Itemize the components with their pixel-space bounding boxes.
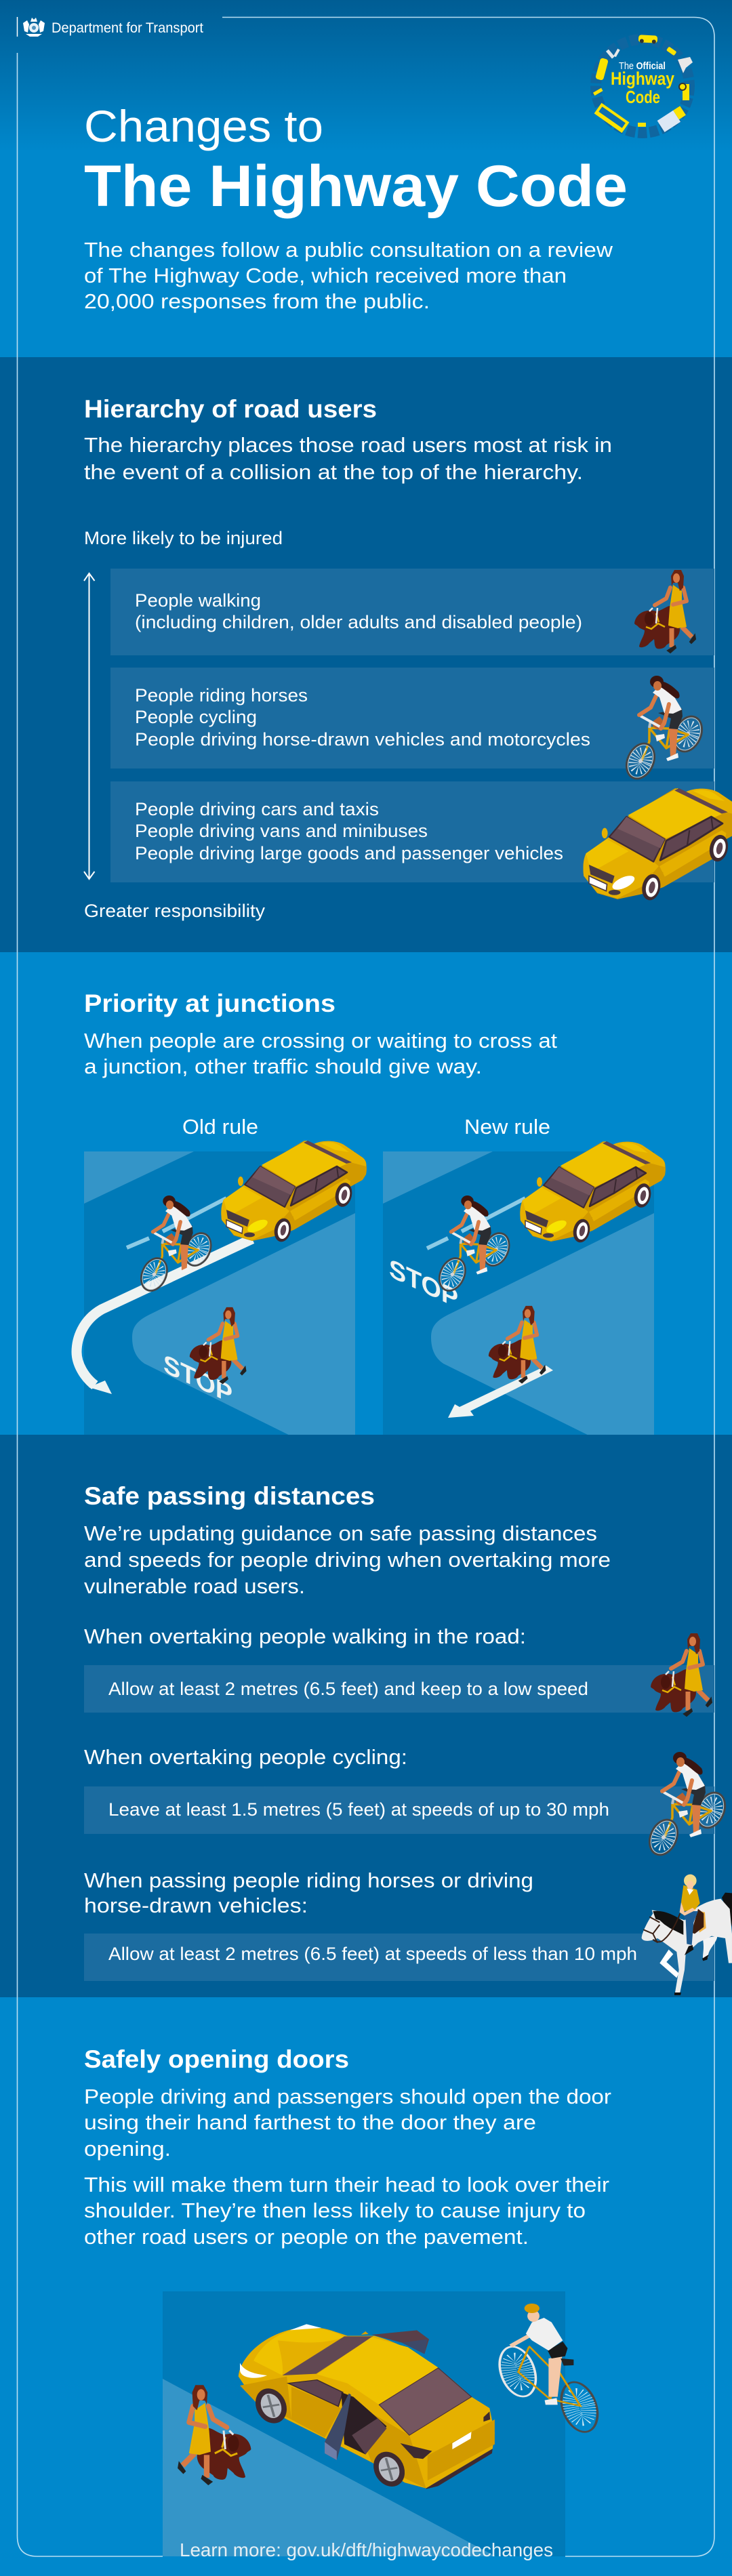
icon: yellow car [583,788,732,902]
row: people riding horses, cycling, horse-drawn vehicles and motorcycles: People riding horses [135,685,308,706]
heading: safe passing distances: Safe passing distances [84,1482,375,1510]
block: overtaking people walking [84,1624,714,1713]
block: passing people riding horses: horse-drawn vehicles: [84,1894,308,1917]
intro text: The changes follow a public consultation on a review [84,238,613,262]
label: greater responsibility: Greater responsibility [84,901,266,921]
intro text: of The Highway Code, which received more than [84,264,567,287]
logo: The Official Highway Code badge [593,35,693,133]
block: overtaking people cycling [84,1745,714,1834]
illustration: old rule [77,1115,367,1435]
text: turning head description: shoulder. They’re then less likely to cause injury to [84,2199,586,2222]
row: people riding horses, cycling, horse-drawn vehicles and motorcycles: People cycling [135,707,257,727]
text: safe passing description: vulnerable road users. [84,1574,305,1598]
logo: The Official Highway Code badge: Code [626,87,660,107]
text: hierarchy description [84,433,612,484]
text: opening doors description: People driving and passengers should open the door [84,2085,611,2108]
title: Changes to [84,101,323,151]
intro text [84,238,613,313]
text: hierarchy description: The hierarchy places those road users most at risk in [84,433,612,457]
illustration: new rule: STOP [389,1254,458,1314]
heading: safely opening doors: Safely opening doors [84,2045,349,2073]
title: The Highway Code [84,154,628,219]
panel: safe passing distances [84,1482,732,1995]
illustration: old rule: Old rule [182,1115,258,1139]
icon: car with open door [239,2324,495,2489]
row: people driving cars, vans and large vehicles: People driving large goods and passenger vehicles [135,843,563,863]
illustration: new rule [383,1115,666,1435]
block: overtaking people cycling: When overtaking people cycling: [84,1745,407,1769]
block: passing people riding horses: When passing people riding horses or driving [84,1868,533,1892]
block: overtaking people cycling: Leave at least 1.5 metres (5 feet) at speeds of up to 30 mph [108,1799,609,1820]
link: learn more: Learn more: gov.uk/dft/highwaycodechanges [180,2539,553,2560]
panel: hierarchy of road users [84,395,732,921]
illustration: opening car door [163,2291,603,2556]
block: passing people riding horses: Allow at least 2 metres (6.5 feet) at speeds of less than 10 mph [108,1944,637,1964]
text: safe passing description: and speeds for people driving when overtaking more [84,1548,611,1572]
text: safe passing description: We’re updating guidance on safe passing distances [84,1521,597,1545]
logo: Department for Transport: Department for Transport [52,20,203,36]
row: people walking: (including children, older adults and disabled people) [135,612,582,632]
text: turning head description: other road users or people on the pavement. [84,2225,529,2249]
row: people driving cars, vans and large vehicles [110,781,714,882]
row: people driving cars, vans and large vehicles: People driving vans and minibuses [135,821,428,841]
icon: person cycling with helmet [494,2304,603,2434]
text: safe passing description [84,1521,611,1598]
text: turning head description: This will make them turn their head to look over their [84,2173,609,2196]
icon: person walking with guide dog [634,570,695,653]
text: priority description: a junction, other traffic should give way. [84,1055,482,1078]
heading: priority at junctions: Priority at junctions [84,989,336,1017]
illustration: new rule: New rule [464,1115,550,1139]
panel: safely opening doors [84,2045,611,2560]
row: people walking [110,569,714,655]
logo: The Official Highway Code badge: Highway [611,68,674,89]
row: people walking: People walking [135,590,261,611]
title [84,101,628,219]
icon: person cycling [645,1752,730,1859]
block: passing people riding horses [84,1868,714,1981]
text: turning head description [84,2173,609,2249]
icon: person walking with guide dog [178,2385,251,2485]
text: priority description [84,1029,557,1078]
section: header background [0,0,732,357]
logo: Department for Transport [18,17,203,37]
panel: priority at junctions [77,989,666,1435]
text: opening doors description [84,2085,611,2161]
logo: The Official Highway Code badge: The Official [619,60,666,72]
icon: person walking with guide dog [651,1633,712,1716]
heading: hierarchy of road users: Hierarchy of road users [84,395,377,423]
label: more likely to be injured: More likely to be injured [84,528,283,548]
icon: person cycling [622,676,707,783]
icon: person riding horse [642,1875,732,1995]
text: priority description: When people are crossing or waiting to cross at [84,1029,557,1052]
row: people riding horses, cycling, horse-drawn vehicles and motorcycles [110,668,714,769]
row: people riding horses, cycling, horse-drawn vehicles and motorcycles: People driving horse-drawn vehicles and motorcycles [135,729,590,750]
text: hierarchy description: the event of a collision at the top of the hierarchy. [84,460,583,484]
text: opening doors description: using their hand farthest to the door they are [84,2110,536,2134]
block: overtaking people walking: When overtaking people walking in the road: [84,1624,526,1648]
text: opening doors description: opening. [84,2137,171,2161]
arrow: double-headed responsibility arrow [84,573,95,879]
illustration: old rule: STOP [163,1349,232,1410]
block: overtaking people walking: Allow at least 2 metres (6.5 feet) and keep to a low speed [108,1679,588,1699]
intro text: 20,000 responses from the public. [84,289,430,313]
row: people driving cars, vans and large vehicles: People driving cars and taxis [135,799,379,819]
